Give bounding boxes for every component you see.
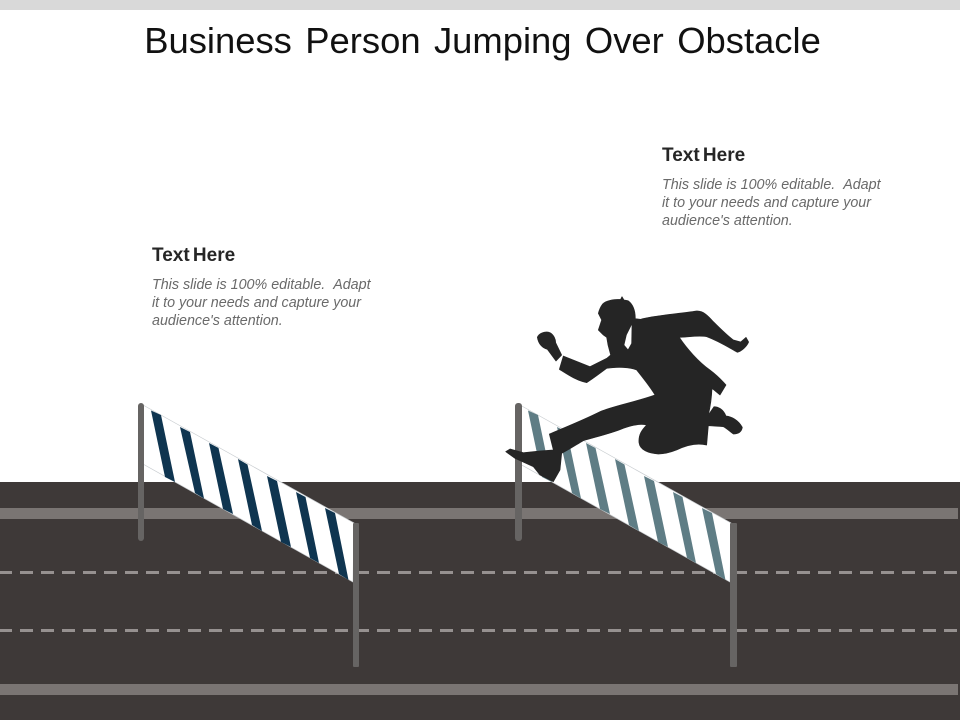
text block: left: audience's attention.: [152, 313, 283, 329]
text block: right: audience's attention.: [662, 213, 793, 229]
hurdle: right: [515, 403, 737, 667]
text block: left: [152, 244, 372, 329]
text block: right: This slide is 100% editable. Adapt: [662, 177, 881, 193]
text block: left: This slide is 100% editable. Adapt: [152, 277, 371, 293]
silhouette: business person jumping: [506, 297, 749, 482]
top grey bar: [0, 0, 960, 10]
hurdle: left: [138, 403, 359, 667]
text block: right: Text Here: [662, 144, 745, 166]
text block: right: [662, 144, 882, 229]
title: Business Person Jumping Over Obstacle: [144, 20, 821, 61]
road: [0, 482, 960, 720]
text block: left: Text Here: [152, 244, 235, 266]
text block: right: it to your needs and capture your: [662, 195, 871, 211]
text block: left: it to your needs and capture your: [152, 295, 361, 311]
